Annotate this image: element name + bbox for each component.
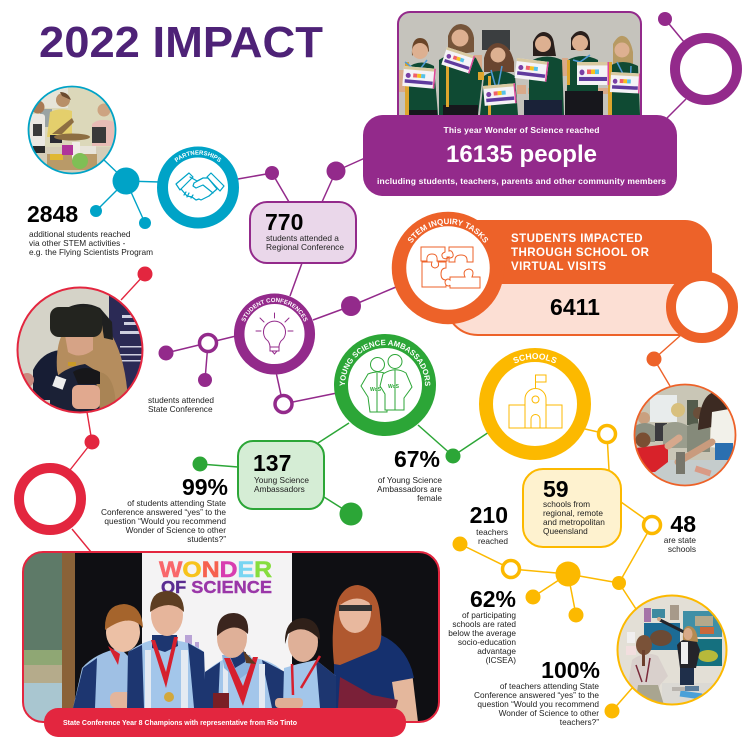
stat: 62% ICSEA: below the average	[448, 628, 516, 638]
label: schools: SCHOOLS	[513, 353, 557, 364]
panel: 16135 people reached: This year Wonder of Science reached	[444, 125, 600, 135]
stat: 99% recommend	[101, 474, 228, 544]
label: STEM inquiry tasks: STEM INQUIRY TASKS	[408, 218, 488, 243]
panel: schools ring	[479, 348, 591, 460]
stat: 67% female	[377, 446, 442, 503]
text: students attended State Conference: students attended	[148, 395, 214, 405]
stat: 99% recommend: Conference answered “yes” to the	[101, 507, 226, 517]
panel: partnerships ring	[157, 146, 239, 228]
stat: 48 state schools	[664, 511, 696, 554]
panel: 137 young science ambassadors: Ambassadors	[254, 484, 305, 494]
photo: students doing a school task	[634, 384, 736, 488]
stat: 100% teachers recommend	[474, 657, 600, 727]
text: students attended State Conference	[148, 395, 214, 414]
icon: handshake	[176, 173, 224, 200]
connector network: green	[192, 423, 489, 526]
stat: 2848 additional students: e.g. the Flying Scientists Program	[29, 247, 153, 257]
panel: 59 schools: schools from	[543, 499, 590, 509]
panel: 59 schools: regional, remote	[543, 508, 603, 518]
stat: 2848 additional students: 2848	[27, 201, 78, 227]
stat: 100% teachers recommend: Wonder of Science to other	[499, 708, 599, 718]
icon: puzzle pieces	[421, 247, 480, 288]
connector network: orange	[646, 335, 681, 386]
stat: 62% ICSEA: 62%	[470, 586, 516, 612]
panel: 59 schools: 59	[543, 476, 569, 502]
stat: 99% recommend: 99%	[182, 474, 228, 500]
stat: 48 state schools: 48	[670, 511, 696, 537]
connector network: red	[70, 266, 152, 552]
stat: 100% teachers recommend: Conference answered “yes” to the	[474, 690, 599, 700]
icon: two lab coats	[361, 354, 412, 412]
stat: 67% female: female	[417, 493, 442, 503]
stat: 2848 additional students	[27, 201, 153, 257]
connector network: purple	[158, 12, 686, 412]
stat: 48 state schools: schools	[668, 544, 696, 554]
stat: 67% female: 67%	[394, 446, 440, 472]
label: partnerships: PARTNERSHIPS	[174, 150, 222, 162]
panel: 59 schools: Queensland	[543, 526, 588, 536]
icon: school building	[509, 375, 562, 428]
caption: state conference champions: State Conference Year 8 Champions with representative from Rio Tinto	[63, 720, 297, 727]
stat: 99% recommend: students?”	[187, 534, 226, 544]
ring: purple	[675, 38, 737, 100]
panel: 16135 people reached: including students, teachers, parents and other community members	[377, 176, 666, 186]
panel: 16135 people reached: 16135 people	[446, 141, 597, 168]
panel: 137 young science ambassadors: 137	[253, 450, 291, 476]
panel: 770 regional conference: Regional Conference	[266, 242, 344, 252]
panel: 16135 people reached	[363, 115, 677, 196]
panel: 137 young science ambassadors	[238, 441, 324, 509]
connector network: partnerships	[90, 160, 160, 229]
ring: red	[19, 468, 81, 530]
photo: state conference champions	[22, 552, 440, 723]
stat: 100% teachers recommend: question “Would you recommend	[477, 699, 599, 709]
photo: presenter with reef posters	[617, 595, 728, 705]
stat: 2848 additional students: via other STEM activities -	[29, 238, 126, 248]
stat: 62% ICSEA: advantage	[477, 646, 516, 656]
stat: 100% teachers recommend: of teachers attending State	[500, 681, 599, 691]
panel: student conferences ring	[234, 294, 316, 374]
icon: two lab coats: WoS	[388, 384, 400, 390]
panel: 59 schools: and metropolitan	[543, 517, 605, 527]
caption: state conference champions	[44, 708, 406, 737]
photo: state conference champions: OF SCIENCE	[161, 577, 272, 597]
photo: students with cardboard model	[28, 86, 116, 174]
label: young science ambassadors: YOUNG SCIENCE AMBASSADORS	[340, 340, 430, 386]
stat: 62% ICSEA: (ICSEA)	[486, 655, 516, 665]
stat: 210 teachers	[470, 502, 508, 546]
photo: students with certificates	[397, 12, 641, 115]
panel: 770 regional conference: 770	[265, 209, 303, 235]
stat: 48 state schools: are state	[664, 535, 696, 545]
stat: 6411: 6411	[550, 294, 600, 320]
panel: 770 regional conference: students attended a	[266, 233, 339, 243]
heading: students impacted: THROUGH SCHOOL OR	[511, 247, 650, 259]
stat: 210 teachers: 210	[470, 502, 508, 528]
panel: 59 schools	[523, 469, 621, 547]
heading: students impacted: STUDENTS IMPACTED	[511, 233, 643, 245]
label: student conferences: STUDENT CONFERENCES	[242, 298, 308, 322]
panel: young science ambassadors ring	[334, 334, 436, 436]
panel: 137 young science ambassadors: Young Science	[254, 475, 309, 485]
stat: 99% recommend: Wonder of Science to other	[126, 525, 226, 535]
stat: 62% ICSEA: socio-education	[458, 637, 516, 647]
stat: 99% recommend: of students attending State	[127, 498, 226, 508]
stat: 100% teachers recommend: 100%	[541, 657, 600, 683]
icon: two lab coats: WoS	[370, 387, 382, 393]
stat: 100% teachers recommend: teachers?”	[560, 717, 599, 727]
stat: 62% ICSEA: schools are rated	[452, 619, 516, 629]
stat: 67% female: of Young Science	[378, 475, 442, 485]
heading: students impacted: VIRTUAL VISITS	[511, 261, 607, 273]
panel: STEM inquiry tasks	[392, 212, 738, 343]
stat: 62% ICSEA	[448, 586, 516, 665]
panel: 770 regional conference	[250, 202, 356, 263]
stat: 2848 additional students: additional students reached	[29, 229, 131, 239]
icon: light bulb	[256, 313, 293, 354]
connector network: yellow	[452, 426, 660, 718]
stat: 99% recommend: question “Would you recommend	[104, 516, 226, 526]
title: 2022 IMPACT	[39, 18, 323, 67]
banner logo: wonder of science: WONDER	[159, 557, 272, 582]
photo: student wearing VR headset	[17, 287, 143, 413]
stat: 67% female: Ambassadors are	[377, 484, 442, 494]
text: students attended State Conference: State Conference	[148, 404, 213, 414]
stat: 210 teachers: reached	[478, 536, 508, 546]
stat: 62% ICSEA: of participating	[462, 610, 516, 620]
stat: 210 teachers: teachers	[476, 527, 508, 537]
